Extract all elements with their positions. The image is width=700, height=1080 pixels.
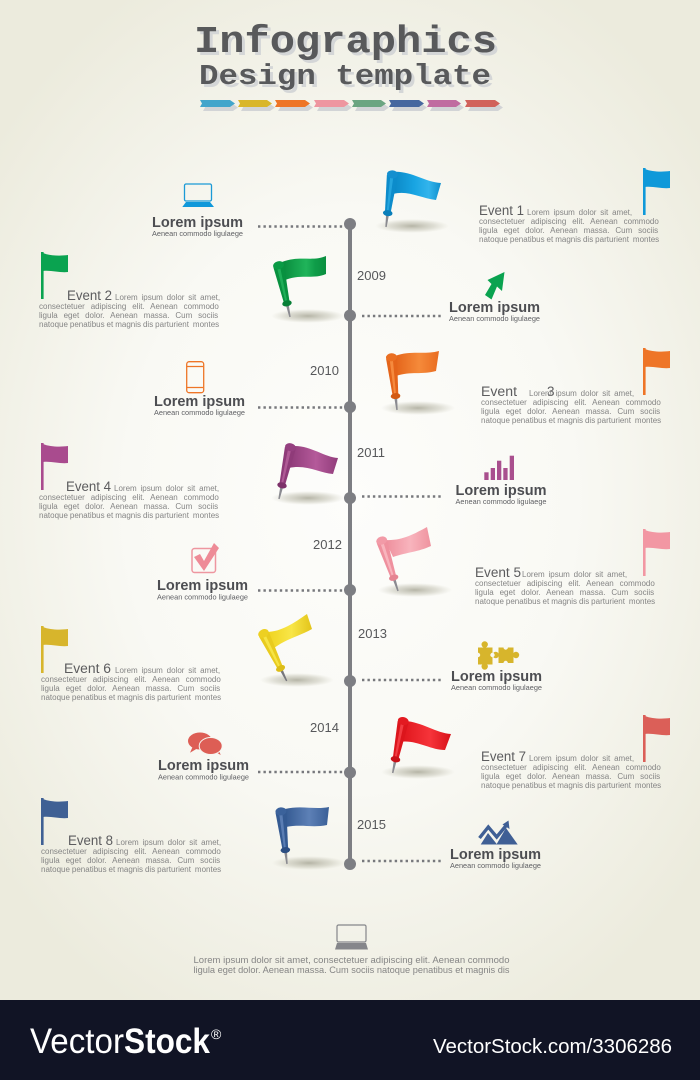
title block bbox=[194, 21, 500, 107]
small flag: event 1 bbox=[643, 168, 670, 215]
icon: grey laptop bbox=[335, 925, 368, 950]
event 3 text: 3 bbox=[547, 384, 555, 399]
event 7 text: Lorem ipsum dolor sit amet, bbox=[529, 754, 634, 763]
icon: mountains with rising arrow bbox=[480, 820, 518, 844]
small flag: event 3 bbox=[643, 348, 670, 395]
pin flag: red bbox=[381, 716, 455, 779]
year labels: 2010 bbox=[310, 363, 339, 378]
event 1 text: consectetuer adipiscing elit. Aenean commodo bbox=[479, 217, 659, 226]
event 1 text: natoque penatibus et magnis dis parturient montes bbox=[479, 235, 659, 244]
label 6 bbox=[451, 668, 542, 692]
title: Infographics bbox=[194, 21, 497, 64]
event 5 text: Lorem ipsum dolor sit amet, bbox=[522, 570, 627, 579]
icon: orange phone bbox=[187, 362, 204, 393]
label 2 bbox=[449, 299, 540, 323]
small flag: event 4 bbox=[41, 443, 68, 490]
year labels: 2009 bbox=[357, 268, 386, 283]
event 8 text: Lorem ipsum dolor sit amet, bbox=[116, 838, 221, 847]
event 2 text: natoque penatibus et magnis dis parturient montes bbox=[39, 320, 219, 329]
event 7 text: Event 7 bbox=[481, 749, 526, 764]
label 7 bbox=[158, 757, 249, 782]
timeline bbox=[344, 218, 356, 870]
watermark band bbox=[0, 1000, 700, 1080]
label 4: Lorem ipsum bbox=[456, 482, 546, 499]
icon: pink checkbox bbox=[192, 543, 219, 572]
label 8: Lorem ipsum bbox=[450, 846, 541, 863]
event 3 text: ligula eget dolor. Aenean massa. Cum sociis bbox=[481, 407, 660, 416]
year labels: 2011 bbox=[357, 445, 385, 460]
event 8 text: natoque penatibus et magnis dis parturient montes bbox=[41, 865, 221, 874]
event 2 text: consectetuer adipiscing elit. Aenean commodo bbox=[39, 302, 219, 311]
event 4 text: natoque penatibus et magnis dis parturient montes bbox=[39, 511, 219, 520]
pin flag: navy bbox=[272, 807, 346, 870]
footer text: Lorem ipsum dolor sit amet, consectetuer adipiscing elit. Aenean commodo bbox=[194, 955, 510, 965]
event 1 text: Lorem ipsum dolor sit amet, bbox=[527, 208, 632, 217]
pin flag: yellow bbox=[257, 614, 334, 687]
event 8 text: consectetuer adipiscing elit. Aenean commodo bbox=[41, 847, 221, 856]
label 6: Lorem ipsum bbox=[451, 668, 542, 685]
event 2 text bbox=[39, 288, 220, 329]
event 5 text: consectetuer adipiscing elit. Aenean commodo bbox=[475, 579, 655, 588]
VectorStock logo bbox=[30, 1022, 222, 1061]
image id: VectorStock.com/3306286 bbox=[433, 1036, 672, 1058]
dotted connectors bbox=[258, 226, 443, 861]
colored arrow strip bbox=[200, 100, 500, 107]
icon: blue laptop bbox=[182, 184, 214, 207]
label 7: Aenean commodo ligulaege bbox=[158, 772, 249, 782]
icon: green arrow bbox=[485, 272, 504, 300]
pin flag: orange bbox=[381, 351, 455, 415]
event 4 text: Event 4 bbox=[66, 479, 111, 494]
event 7 text: consectetuer adipiscing elit. Aenean commodo bbox=[481, 763, 661, 772]
icon: puzzle pieces bbox=[476, 641, 519, 670]
event 5 text: ligula eget dolor. Aenean massa. Cum sociis bbox=[475, 588, 654, 597]
event 4 text: ligula eget dolor. Aenean massa. Cum sociis bbox=[39, 502, 218, 511]
label 2: Lorem ipsum bbox=[449, 299, 540, 316]
small flag: event 2 bbox=[41, 252, 68, 299]
year labels: 2012 bbox=[313, 537, 342, 552]
label 3 bbox=[154, 393, 245, 417]
event 6 text bbox=[41, 661, 221, 702]
pin flag: blue bbox=[375, 170, 449, 233]
event 4 text bbox=[39, 479, 219, 520]
year labels: 2015 bbox=[357, 817, 386, 832]
event 1 text bbox=[479, 203, 659, 244]
event 3 text: natoque penatibus et magnis dis parturient montes bbox=[481, 416, 661, 425]
event 6 text: ligula eget dolor. Aenean massa. Cum sociis bbox=[41, 684, 220, 693]
small flag: event 7 bbox=[643, 715, 670, 762]
icon: purple bars bbox=[484, 456, 514, 480]
event 1 text: ligula eget dolor. Aenean massa. Cum sociis bbox=[479, 226, 658, 235]
event 7 text bbox=[481, 749, 661, 790]
label 7: Lorem ipsum bbox=[158, 757, 249, 774]
event 6 text: natoque penatibus et magnis dis parturient montes bbox=[41, 693, 221, 702]
label 5: Aenean commodo ligulaege bbox=[157, 592, 248, 602]
VectorStock logo: ® bbox=[211, 1026, 222, 1042]
VectorStock logo: Stock bbox=[124, 1022, 210, 1061]
footer text bbox=[194, 955, 510, 975]
event 7 text: ligula eget dolor. Aenean massa. Cum sociis bbox=[481, 772, 660, 781]
event 6 text: consectetuer adipiscing elit. Aenean commodo bbox=[41, 675, 221, 684]
event 5 text bbox=[475, 565, 655, 606]
label 5: Lorem ipsum bbox=[157, 577, 248, 594]
event 5 text: Event 5 bbox=[475, 565, 521, 580]
icon: chat bubbles bbox=[188, 732, 222, 755]
event 3 text: Lorem ipsum dolor sit amet, bbox=[529, 389, 634, 398]
label 1: Aenean commodo ligulaege bbox=[152, 229, 243, 238]
label 5 bbox=[157, 577, 248, 602]
label 4 bbox=[456, 482, 546, 506]
event 3 text: Event bbox=[481, 384, 517, 399]
label 1: Lorem ipsum bbox=[152, 214, 243, 231]
label 3: Aenean commodo ligulaege bbox=[154, 408, 245, 417]
event 7 text: natoque penatibus et magnis dis parturient montes bbox=[481, 781, 661, 790]
event 3 text: consectetuer adipiscing elit. Aenean commodo bbox=[481, 398, 661, 407]
event 4 text: Lorem ipsum dolor sit amet, bbox=[114, 484, 219, 493]
event 8 text: Event 8 bbox=[68, 833, 113, 848]
pin flag: pink bbox=[375, 527, 452, 597]
event 6 text: Lorem ipsum dolor sit amet, bbox=[115, 666, 220, 675]
subtitle: Design template bbox=[199, 60, 491, 93]
small flag: event 5 bbox=[643, 529, 670, 576]
event 5 text: natoque penatibus et magnis dis parturient montes bbox=[475, 597, 655, 606]
label 6: Aenean commodo ligulaege bbox=[451, 683, 542, 692]
label 8 bbox=[450, 846, 541, 870]
event 2 text: Event 2 bbox=[67, 288, 112, 303]
small flag: event 8 bbox=[41, 798, 68, 845]
event 3 text bbox=[481, 384, 661, 425]
label 4: Aenean commodo ligulaege bbox=[456, 497, 546, 506]
label 2: Aenean commodo ligulaege bbox=[449, 314, 540, 323]
event 6 text: Event 6 bbox=[64, 661, 111, 676]
year labels: 2014 bbox=[310, 720, 339, 735]
pin flag: green bbox=[271, 256, 345, 323]
event 8 text bbox=[41, 833, 221, 874]
event 1 text: Event 1 bbox=[479, 203, 524, 218]
year labels: 2013 bbox=[358, 626, 387, 641]
label 8: Aenean commodo ligulaege bbox=[450, 861, 541, 870]
pin flag: purple bbox=[271, 442, 345, 505]
footer text: ligula eget dolor. Aenean massa. Cum sociis natoque penatibus et magnis dis bbox=[194, 965, 510, 975]
event 2 text: Lorem ipsum dolor sit amet, bbox=[115, 293, 220, 302]
event 4 text: consectetuer adipiscing elit. Aenean commodo bbox=[39, 493, 219, 502]
event 2 text: ligula eget dolor. Aenean massa. Cum sociis bbox=[39, 311, 218, 320]
event 8 text: ligula eget dolor. Aenean massa. Cum sociis bbox=[41, 856, 220, 865]
VectorStock logo: Vector bbox=[30, 1022, 124, 1061]
label 3: Lorem ipsum bbox=[154, 393, 245, 410]
small flag: event 6 bbox=[41, 626, 68, 673]
label 1 bbox=[152, 214, 243, 238]
year labels bbox=[310, 268, 387, 832]
